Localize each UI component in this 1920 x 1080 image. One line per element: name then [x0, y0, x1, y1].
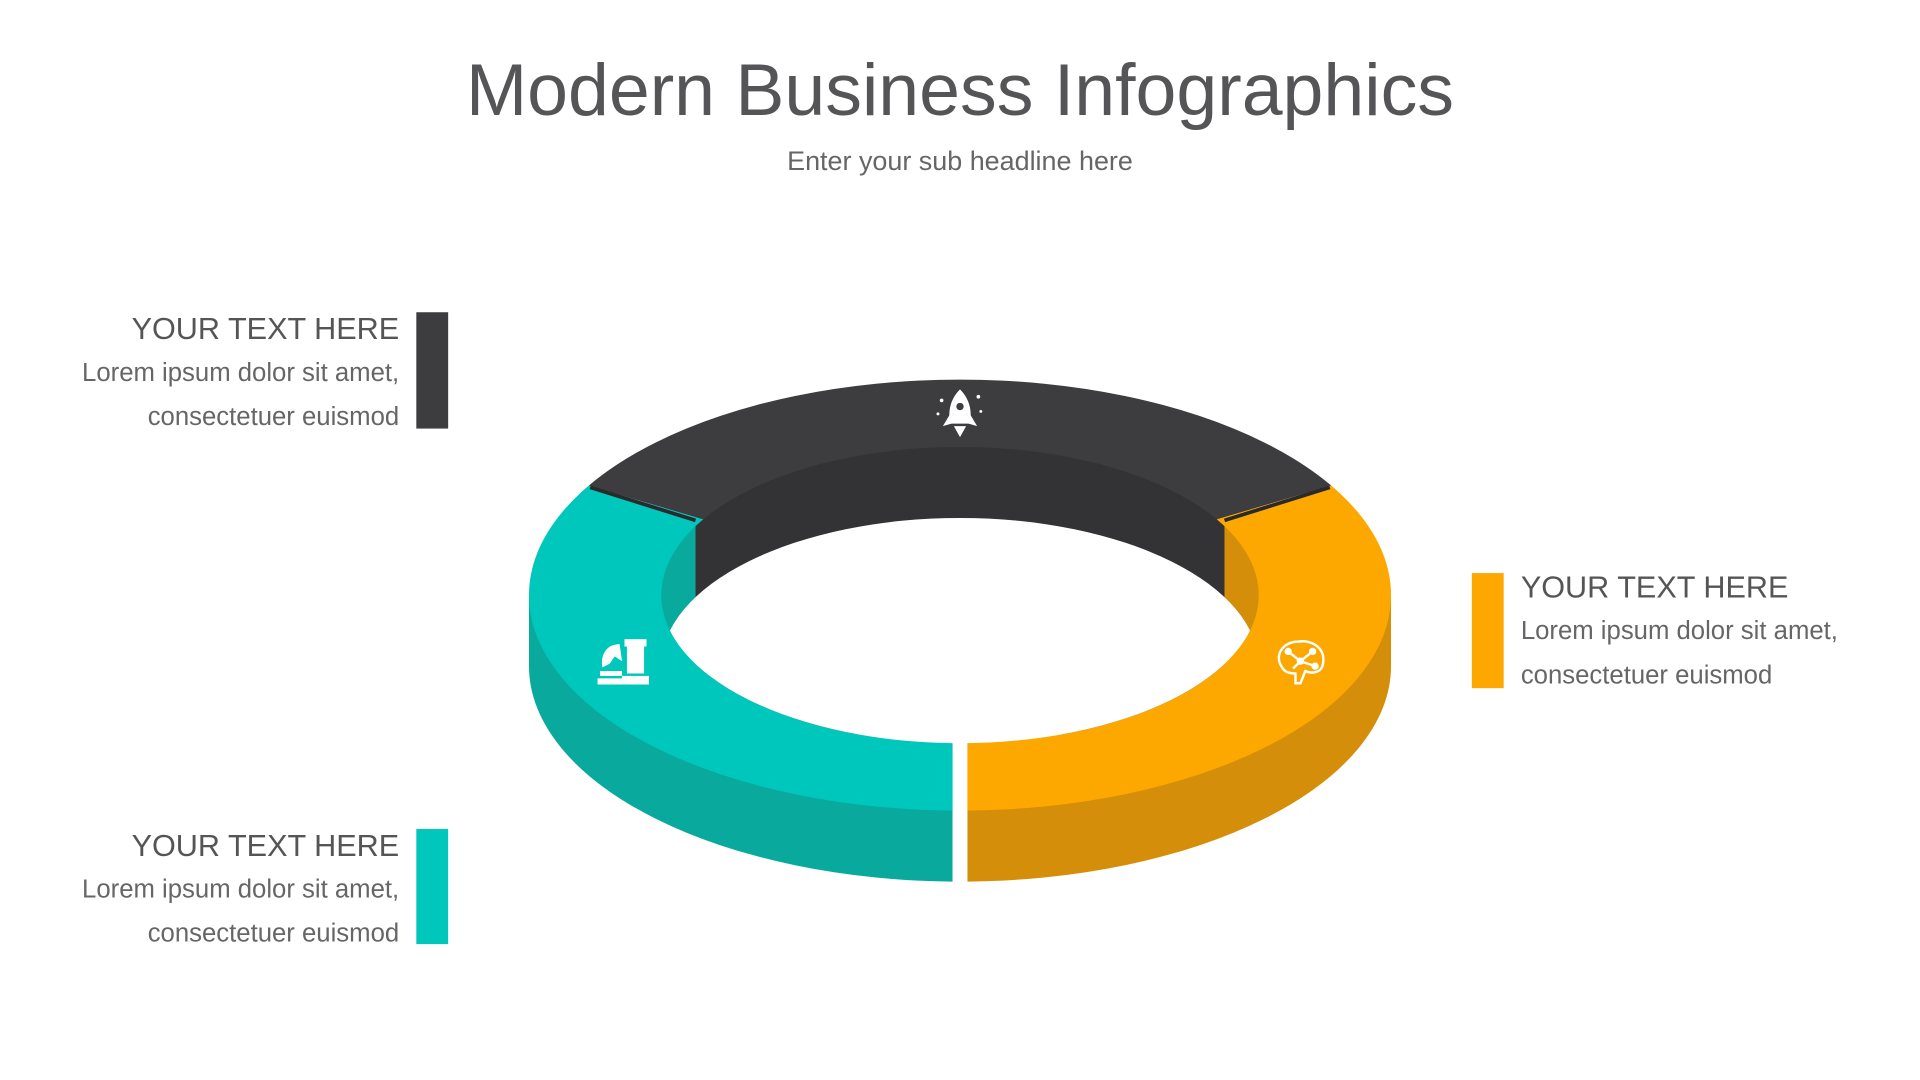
ring chart: [529, 380, 1391, 894]
text block: right: [1521, 571, 1838, 689]
text block: right: consectetuer euismod: [1521, 661, 1772, 689]
icon: rocket: [936, 389, 982, 437]
text block: right: Lorem ipsum dolor sit amet,: [1521, 617, 1838, 645]
text block: top left: Lorem ipsum dolor sit amet,: [82, 359, 399, 387]
segment: orange (right): [967, 486, 1392, 882]
text block: top left: YOUR TEXT HERE: [132, 312, 399, 346]
bar: teal: [416, 829, 448, 944]
icon: brain network: [1279, 641, 1323, 683]
text block: bottom left: Lorem ipsum dolor sit amet,: [82, 876, 399, 904]
text block: bottom left: consectetuer euismod: [148, 920, 399, 948]
text block: bottom left: YOUR TEXT HERE: [132, 829, 399, 863]
bar: orange: [1472, 573, 1504, 688]
segment: teal (left): [528, 486, 953, 882]
title: Modern Business Infographics: [466, 48, 1454, 131]
subtitle: Enter your sub headline here: [787, 146, 1133, 176]
text block: bottom left: [82, 829, 399, 948]
icon: chess pieces: [598, 639, 649, 684]
text block: right: YOUR TEXT HERE: [1521, 571, 1788, 605]
text block: top left: consectetuer euismod: [148, 403, 399, 431]
bar: dark: [416, 312, 448, 429]
text block: top left: [82, 312, 399, 431]
segment: dark (top): [588, 380, 1332, 520]
